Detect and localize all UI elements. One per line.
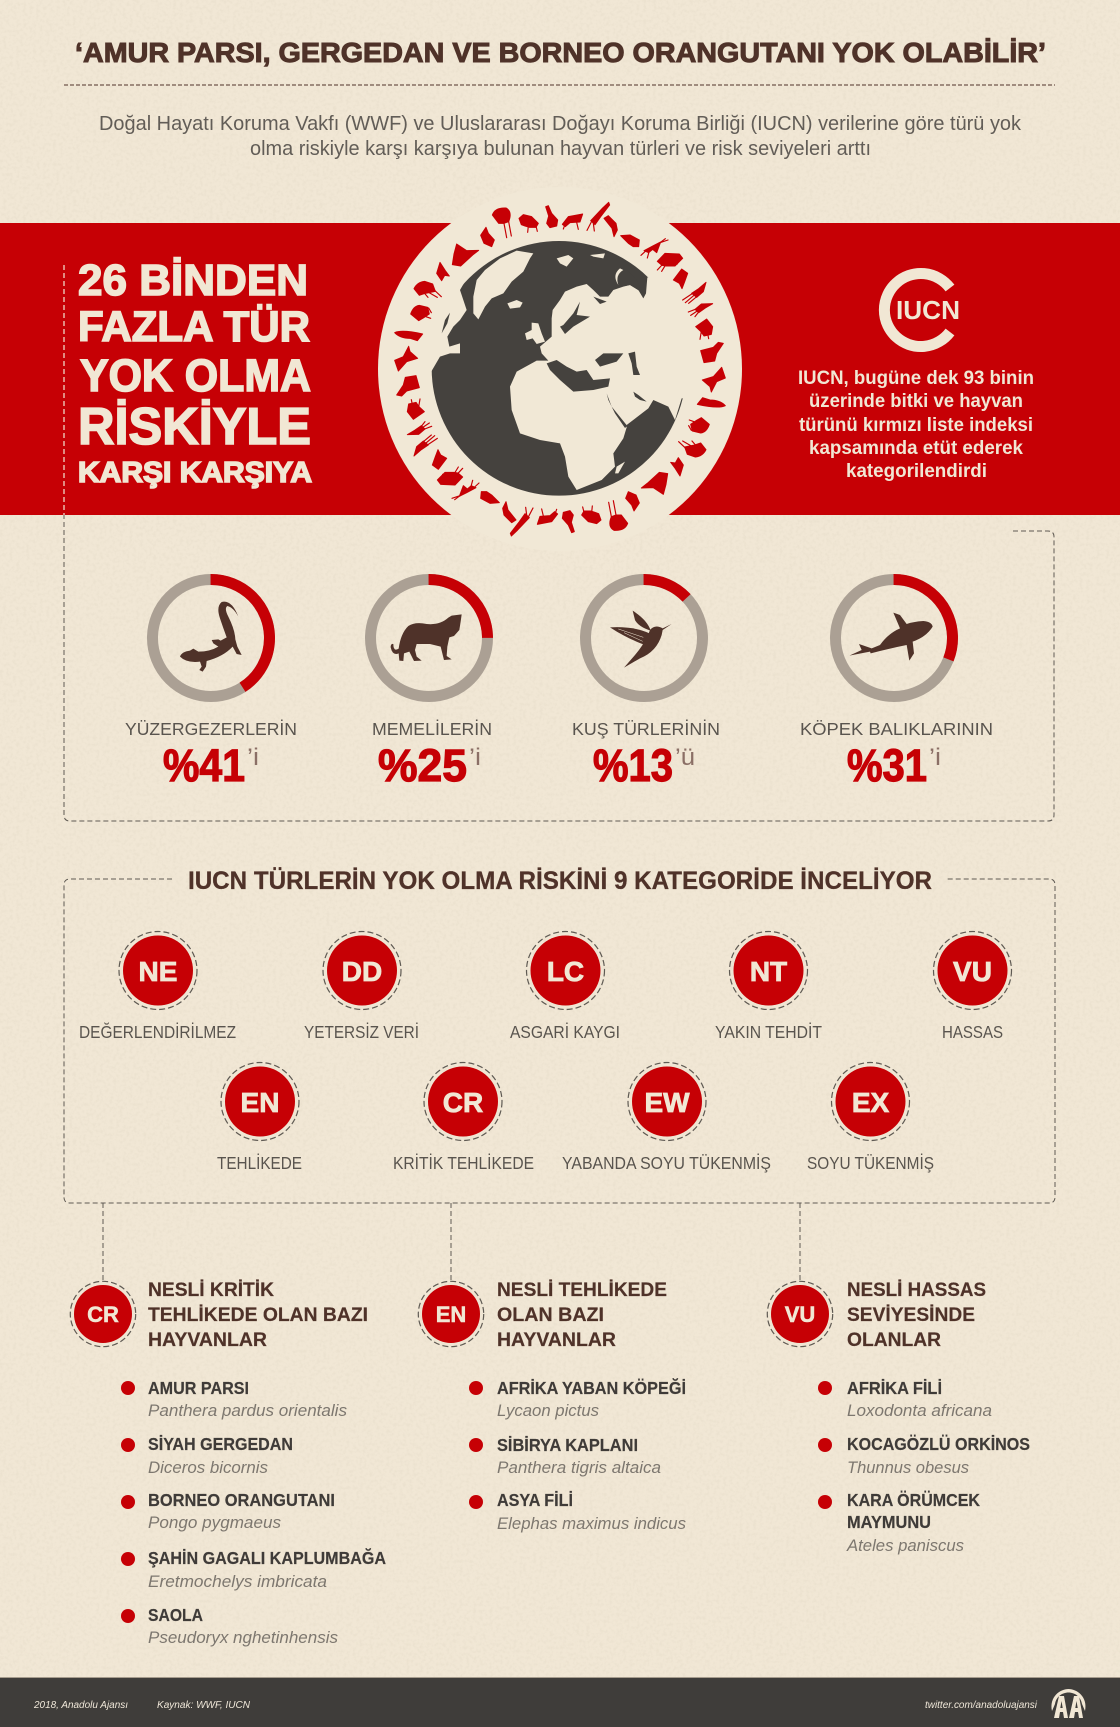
- species list: endangered: Panthera tigris altaica: [497, 1458, 661, 1477]
- column: critically endangered: [70, 1203, 386, 1647]
- category: NE: DEĞERLENDİRİLMEZ: [79, 1021, 236, 1042]
- icon: AA logo: [1051, 1689, 1086, 1718]
- category: EX: SOYU TÜKENMİŞ: [807, 1153, 934, 1173]
- stat: birds: KUŞ TÜRLERİNİN: [572, 719, 720, 739]
- category: EX: [807, 1062, 934, 1173]
- species list: vulnerable: KOCAGÖZLÜ ORKİNOS: [847, 1434, 1030, 1454]
- species list: vulnerable: AFRİKA FİLİ: [847, 1378, 942, 1398]
- footer: Kaynak: WWF, IUCN: [157, 1700, 251, 1711]
- species list: critically endangered: ŞAHİN GAGALI KAPLUMBAĞA: [148, 1547, 386, 1568]
- stat: reptiles: [125, 580, 297, 791]
- column: critically endangered: CR: [87, 1302, 119, 1327]
- species list: critically endangered: SAOLA: [148, 1605, 203, 1625]
- stat: sharks: KÖPEK BALIKLARININ: [800, 719, 993, 739]
- column: endangered: [418, 1203, 686, 1533]
- icon: hummingbird: [610, 611, 672, 668]
- heading: critically endangered: TEHLİKEDE OLAN BAZI: [148, 1303, 368, 1326]
- species list: endangered: SİBİRYA KAPLANI: [497, 1435, 638, 1455]
- category: VU: VU: [953, 956, 992, 987]
- category: CR: CR: [443, 1087, 483, 1118]
- category: CR: [393, 1062, 534, 1173]
- heading: critically endangered: NESLİ KRİTİK: [148, 1278, 274, 1301]
- category: NT: NT: [750, 956, 787, 987]
- species list: critically endangered: BORNEO ORANGUTANI: [148, 1490, 335, 1510]
- text: IUCN note: [798, 368, 1034, 482]
- heading: 26 binden: FAZLA TÜR: [78, 303, 310, 351]
- icon: salamander: [180, 602, 242, 672]
- heading: 26 binden: 26 BİNDEN: [78, 256, 308, 305]
- icon: IUCN logo: IUCN: [896, 295, 960, 325]
- species list: vulnerable: Thunnus obesus: [847, 1458, 969, 1477]
- heading: 26 binden: [78, 256, 312, 489]
- column: vulnerable: [767, 1203, 1030, 1555]
- text: IUCN note: türünü kırmızı liste indeksi: [799, 415, 1033, 436]
- panel: globe disc: [378, 187, 742, 551]
- category: CR: KRİTİK TEHLİKEDE: [393, 1153, 534, 1173]
- species list: critically endangered: Pongo pygmaeus: [148, 1513, 281, 1532]
- heading: endangered: OLAN BAZI: [497, 1304, 604, 1326]
- category: EX: EX: [852, 1087, 889, 1118]
- heading: vulnerable: NESLİ HASSAS: [847, 1278, 986, 1301]
- category: LC: [510, 932, 620, 1042]
- intro text: Doğal Hayatı Koruma Vakfı (WWF) ve Uluslararası Doğayı Koruma Birliği (IUCN) verilerine göre türü yok: [99, 113, 1022, 135]
- species list: critically endangered: SİYAH GERGEDAN: [148, 1434, 293, 1454]
- heading: categories: IUCN TÜRLERİN YOK OLMA RİSKİNİ 9 KATEGORİDE İNCELİYOR: [188, 866, 932, 895]
- species list: endangered: [469, 1377, 686, 1533]
- heading: critically endangered: [148, 1278, 368, 1351]
- category: NE: [79, 932, 236, 1042]
- stat: sharks: ’i: [929, 744, 941, 771]
- category: EW: [562, 1062, 771, 1173]
- category: EW: YABANDA SOYU TÜKENMİŞ: [562, 1153, 771, 1173]
- category: EW: EW: [644, 1087, 690, 1118]
- stat: reptiles: YÜZERGEZERLERİN: [125, 719, 297, 739]
- panel: categories frame: [64, 879, 1055, 1203]
- category: EN: TEHLİKEDE: [217, 1153, 302, 1173]
- icon: shark: [849, 613, 933, 661]
- category: LC: ASGARİ KAYGI: [510, 1022, 620, 1042]
- species list: endangered: ASYA FİLİ: [497, 1490, 573, 1510]
- heading: endangered: NESLİ TEHLİKEDE: [497, 1278, 667, 1301]
- category: LC: LC: [547, 956, 584, 987]
- text: IUCN note: kategorilendirdi: [846, 461, 987, 482]
- species list: critically endangered: Pseudoryx nghetinhensis: [148, 1628, 338, 1647]
- heading: endangered: [497, 1278, 667, 1351]
- category: NT: YAKIN TEHDİT: [715, 1022, 822, 1042]
- stat: mammals: %25: [378, 740, 467, 791]
- heading: 26 binden: RİSKİYLE: [78, 398, 311, 456]
- species list: vulnerable: Loxodonta africana: [847, 1401, 992, 1420]
- heading: vulnerable: [847, 1278, 986, 1351]
- heading: critically endangered: HAYVANLAR: [148, 1329, 267, 1351]
- heading: 26 binden: KARŞI KARŞIYA: [78, 457, 312, 489]
- species list: vulnerable: MAYMUNU: [847, 1512, 931, 1532]
- stat: reptiles: ’i: [247, 744, 259, 771]
- heading: endangered: HAYVANLAR: [497, 1329, 616, 1351]
- category: VU: HASSAS: [942, 1022, 1003, 1042]
- footer: twitter.com/anadoluajansi: [925, 1700, 1038, 1711]
- category: NE: NE: [139, 956, 177, 987]
- icon: panther: [391, 614, 462, 661]
- intro text: [99, 113, 1022, 160]
- text: IUCN note: kapsamında etüt ederek: [809, 438, 1023, 459]
- title: ‘AMUR PARSI, GERGEDAN VE BORNEO ORANGUTANI YOK OLABİLİR’: [75, 37, 1046, 68]
- species list: critically endangered: [121, 1378, 386, 1647]
- category: EN: EN: [241, 1087, 279, 1118]
- species list: endangered: Elephas maximus indicus: [497, 1514, 686, 1533]
- animal ring: [395, 202, 725, 536]
- species list: vulnerable: KARA ÖRÜMCEK: [847, 1490, 980, 1510]
- heading: vulnerable: OLANLAR: [847, 1329, 941, 1351]
- stat: birds: [572, 580, 720, 791]
- panel: red banner: [0, 223, 1120, 515]
- icon: IUCN logo: [884, 274, 960, 347]
- species list: vulnerable: [818, 1378, 1030, 1555]
- stat: reptiles: %41: [163, 740, 245, 791]
- category: DD: DD: [342, 956, 382, 987]
- stat: sharks: [800, 580, 993, 791]
- species list: critically endangered: Diceros bicornis: [148, 1458, 268, 1477]
- stat: mammals: MEMELİLERİN: [372, 719, 492, 739]
- column: vulnerable: VU: [785, 1302, 815, 1327]
- category: DD: [304, 932, 419, 1042]
- species list: endangered: AFRİKA YABAN KÖPEĞİ: [497, 1377, 686, 1398]
- intro text: olma riskiyle karşı karşıya bulunan hayvan türleri ve risk seviyeleri arttı: [250, 138, 871, 160]
- stat: mammals: [370, 580, 492, 791]
- globe: [428, 241, 697, 496]
- species list: endangered: Lycaon pictus: [497, 1401, 599, 1420]
- category: VU: [934, 932, 1012, 1042]
- heading: vulnerable: SEVİYESİNDE: [847, 1303, 975, 1326]
- column: endangered: EN: [436, 1302, 466, 1327]
- species list: critically endangered: AMUR PARSI: [148, 1378, 249, 1398]
- text: IUCN note: IUCN, bugüne dek 93 binin: [798, 368, 1034, 389]
- stat: birds: %13: [593, 740, 673, 791]
- stat: sharks: %31: [847, 740, 927, 791]
- species list: critically endangered: Panthera pardus orientalis: [148, 1401, 347, 1420]
- species list: critically endangered: Eretmochelys imbricata: [148, 1572, 327, 1591]
- category: DD: YETERSİZ VERİ: [304, 1022, 419, 1042]
- stat: mammals: ’i: [469, 744, 481, 771]
- panel: percentages frame: [64, 265, 1054, 821]
- species list: vulnerable: Ateles paniscus: [846, 1536, 964, 1555]
- stat: birds: ’ü: [675, 744, 695, 771]
- category: NT: [715, 932, 822, 1042]
- footer: [0, 1677, 1120, 1727]
- category: EN: [217, 1062, 302, 1173]
- footer: 2018, Anadolu Ajansı: [33, 1700, 128, 1711]
- heading: 26 binden: YOK OLMA: [80, 350, 311, 401]
- text: IUCN note: üzerinde bitki ve hayvan: [809, 391, 1023, 412]
